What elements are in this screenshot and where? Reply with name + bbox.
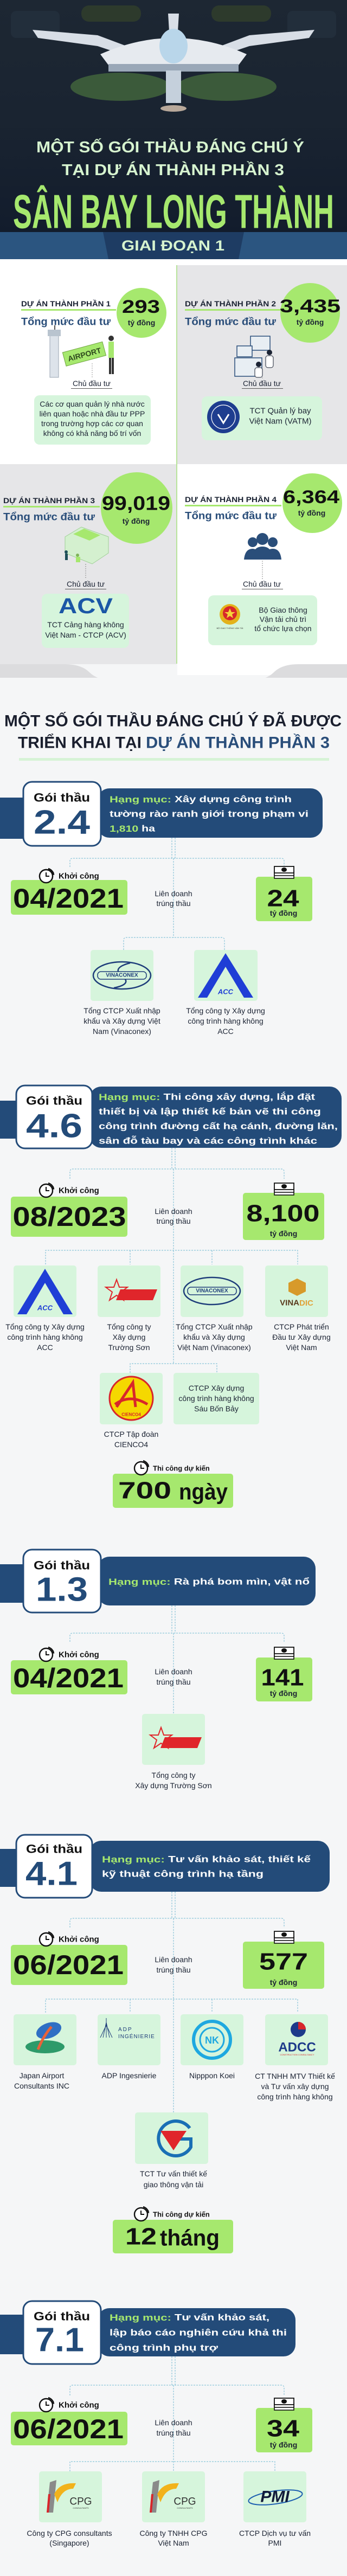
box: VATM: Việt Nam (VATM): [249, 416, 312, 426]
contractor: CPG Viet Nam: CPG: [174, 2496, 196, 2507]
header: Goi thau 2.4: Hạng mục: Xây dựng công trình: [110, 794, 292, 805]
label: Chu dau tu: Chủ đầu tư: [73, 379, 111, 388]
contractor: Sau Bon Bay: CTCP Xây dựng: [189, 1384, 244, 1392]
header: Goi thau 1.3: Gói thầu: [34, 1558, 90, 1572]
contractor: CPG Singapore: CPG: [69, 2496, 92, 2507]
contractor: Vinaconex: Việt Nam (Vinaconex): [177, 1343, 251, 1352]
header: Goi thau 4.1: 4.1: [25, 1855, 78, 1892]
contractor: ACC: ACC: [37, 1303, 53, 1312]
icon: people group: [244, 533, 281, 560]
box: VATM: TCT Quản lý bay: [249, 407, 311, 415]
panel: Du an thanh phan 2: [176, 265, 347, 464]
value: 34 ty dong: 34: [267, 2415, 300, 2442]
duration: 12 thang: Thi công dự kiến: [153, 2210, 210, 2219]
start date: 06/2021: [11, 1932, 127, 1985]
contractor: Vinadic: [265, 1265, 331, 1352]
value: 141 ty dong: 141: [261, 1665, 304, 1691]
contractor: TEDI: TCT Tư vấn thiết kế: [140, 2169, 207, 2178]
header: Goi thau 2.4: 1,810 ha: [110, 823, 156, 834]
contractor: ACC: ACC: [217, 1027, 234, 1036]
header: Goi thau 2.4: 2.4: [34, 804, 91, 841]
contractor: Vinadic: CTCP Phát triển: [274, 1322, 329, 1331]
contractor: Vinaconex: Nam (Vinaconex): [93, 1027, 151, 1036]
panel: Du an thanh phan 2: Tổng mức đầu tư: [185, 317, 276, 327]
contractor: ACC: ACC: [37, 1343, 53, 1352]
value: 34 ty dong: [256, 2398, 312, 2452]
circle: 3,435 ty dong: 3,435: [280, 296, 340, 317]
header: Goi thau 1.3: 1.3: [36, 1571, 88, 1608]
contractor: Vinadic: Việt Nam: [286, 1343, 317, 1352]
title: upper lines: [36, 138, 304, 179]
header: Goi thau 4.6: Hạng mục: Thi công xây dựng, lắp đặt: [99, 1092, 315, 1102]
value: 8,100 ty dong: 8,100: [246, 1200, 320, 1226]
contractor: ADCC: [255, 2014, 335, 2101]
header: Goi thau 4.6: sân đỗ tàu bay và các công trình khác: [99, 1135, 317, 1146]
label: Lien doanh trung thau: Liên doanh: [155, 1207, 192, 1216]
contractor: ADCC: CONSTRUCTION CONSULTANCY: [280, 2053, 314, 2056]
label: Lien doanh trung thau: [155, 2418, 192, 2437]
contractor: CPG Singapore: (Singapore): [49, 2539, 89, 2547]
package 1.3: [0, 1550, 316, 1790]
start date: 04/2021: 04/2021: [13, 1663, 124, 1693]
package 7.1: [0, 2301, 312, 2547]
box: ACV: ACV: [59, 594, 113, 618]
label: Lien doanh trung thau: trúng thầu: [156, 1678, 191, 1686]
section heading: [4, 711, 342, 761]
contractor: Nippon Koei: [181, 2014, 243, 2080]
box: Bo Giao thong Van tai: Vận tải chủ trì: [260, 615, 306, 624]
contractor: Sau Bon Bay: công trình hàng không: [178, 1394, 254, 1403]
icon: airport tower and sign: AIRPORT: [67, 346, 102, 363]
duration: 12 thang: [113, 2207, 233, 2253]
header: Goi thau 4.1: Hạng mục: Tư vấn khảo sát, thiết kế: [102, 1854, 311, 1864]
box: investor 1: liên quan hoặc nhà đầu tư PPP: [40, 409, 145, 418]
contractor: ACC: công trình hàng không: [7, 1333, 83, 1341]
label: Lien doanh trung thau: [155, 1667, 192, 1686]
box: Bo Giao thong Van tai: Bộ Giao thông: [259, 606, 307, 614]
panel: Du an thanh phan 3: Tổng mức đầu tư: [3, 512, 95, 523]
value: 577 ty dong: [243, 1931, 324, 1989]
contractor: Sau Bon Bay: [174, 1373, 259, 1424]
value: 24 ty dong: tỷ đồng: [270, 909, 297, 917]
contractor: Vinaconex: Tổng CTCP Xuất nhập: [176, 1322, 253, 1331]
circle: 293 ty dong: tỷ đồng: [128, 318, 155, 327]
value: 24 ty dong: 24: [267, 885, 299, 912]
contractor: Truong Son: Xây dựng Trường Sơn: [135, 1781, 212, 1790]
package 4.6: [0, 1085, 342, 1508]
box: Bo Giao thong Van tai: tổ chức lựa chọn: [254, 624, 312, 633]
box: investor 1: [34, 395, 151, 445]
panel: Du an thanh phan 2: DỰ ÁN THÀNH PHẦN 2: [185, 299, 276, 308]
duration: 700 ngay: Thi công dự kiến: [153, 1464, 210, 1473]
value: 8,100 ty dong: [243, 1183, 324, 1240]
header: Goi thau 2.4: [0, 782, 323, 846]
box: VATM: [202, 396, 322, 440]
label: Chu dau tu: Chủ đầu tư: [67, 580, 105, 588]
contractor: TEDI: giao thông vận tải: [144, 2180, 203, 2189]
label: Lien doanh trung thau: [155, 1207, 192, 1225]
label: Lien doanh trung thau: [155, 1955, 192, 1974]
contractor: CPG Singapore: [27, 2471, 112, 2547]
contractor: Truong Son: [135, 1714, 212, 1790]
box: Bo Giao thong Van tai: [208, 595, 317, 645]
label: Lien doanh trung thau: trúng thầu: [156, 1217, 191, 1225]
circle: 99,019 ty dong: [101, 472, 172, 544]
header: Goi thau 7.1: Gói thầu: [34, 2310, 90, 2323]
contractor: Truong Son: Xây dựng: [113, 1333, 145, 1341]
circle: 99,019 ty dong: 99,019: [102, 492, 170, 514]
header: airport photo background: [0, 0, 347, 265]
start date: 04/2021: Khởi công: [59, 1650, 99, 1659]
contractor: Truong Son: Tổng công ty: [107, 1322, 151, 1331]
header: Goi thau 1.3: [0, 1550, 316, 1613]
header: Goi thau 4.6: Gói thầu: [26, 1094, 82, 1107]
start date: 04/2021: 04/2021: [13, 883, 124, 914]
header: Goi thau 1.3: Hạng mục: Rà phá bom mìn, vật nổ: [108, 1577, 310, 1586]
icon: airport tower and sign: [48, 325, 114, 377]
contractor: CPG Viet Nam: CONSULTANTS: [177, 2507, 193, 2509]
contractor: ADP Ingenierie: [98, 2014, 160, 2080]
contractor: CPG Viet Nam: Việt Nam: [158, 2539, 189, 2547]
contractor: ADCC: công trình hàng không: [257, 2092, 333, 2101]
contractor: Japan Airport Consultants: [14, 2014, 76, 2090]
contractor: Vinaconex: VINACONEX: [106, 973, 138, 978]
package 4.1: [0, 1835, 335, 2253]
contractor: ACC: [5, 1265, 85, 1352]
contractor: Vinaconex: khẩu và Xây dựng: [183, 1333, 245, 1341]
start date: 08/2023: Khởi công: [59, 1186, 99, 1195]
contractor: CIENCO4: CIENCO4: [114, 1440, 148, 1449]
start date: 06/2021: 06/2021: [13, 1950, 124, 1980]
banner: GIAI ĐOẠN 1: [0, 232, 347, 259]
circle: 6,364 ty dong: [282, 473, 342, 533]
contractor: Japan Airport Consultants: Consultants INC: [14, 2082, 69, 2090]
start date: 04/2021: Khởi công: [59, 872, 99, 881]
duration: 700 ngay: [113, 1461, 233, 1508]
label: Lien doanh trung thau: trúng thầu: [156, 1965, 191, 1974]
contractor: PMI: PMI: [268, 2539, 281, 2547]
start date: 04/2021: [11, 1647, 127, 1694]
contractor: ACC: [186, 950, 265, 1036]
box: ACV: TCT Cảng hàng không: [47, 620, 124, 629]
contractor: CPG Singapore: CONSULTANTS: [73, 2507, 89, 2509]
circle: 6,364 ty dong: 6,364: [283, 487, 339, 508]
header: Goi thau 7.1: Hạng mục: Tư vấn khảo sát,: [110, 2312, 269, 2323]
header: Goi thau 4.1: kỹ thuật công trình hạ tầng: [102, 1868, 264, 1879]
value: 34 ty dong: tỷ đồng: [270, 2440, 297, 2449]
header: Goi thau 4.6: công trình đường cất hạ cánh, đường lăn,: [99, 1121, 338, 1131]
contractor: Vinaconex: [176, 1265, 253, 1352]
package 2.4: [0, 782, 323, 1036]
box: investor 1: Các cơ quan quản lý nhà nước: [40, 400, 145, 408]
contractor: CIENCO4: [100, 1373, 163, 1449]
contractor: Truong Son: Tổng công ty: [152, 1771, 195, 1780]
panel: Du an thanh phan 1: DỰ ÁN THÀNH PHẦN 1: [21, 299, 111, 308]
contractor: ACC: công trình hàng không: [188, 1017, 264, 1025]
contractor: Vinaconex: [83, 950, 160, 1036]
contractor: ACC: Tổng công ty Xây dựng: [5, 1322, 85, 1331]
icon: terminal building: [65, 527, 108, 579]
icon: air traffic controllers: [235, 336, 273, 380]
contractor: Truong Son: [98, 1265, 160, 1352]
value: 141 ty dong: [256, 1647, 312, 1701]
start date: 06/2021: 06/2021: [13, 2414, 124, 2444]
circle: 293 ty dong: [117, 288, 166, 338]
panel: Du an thanh phan 1: [0, 265, 177, 464]
value: 24 ty dong: [256, 866, 312, 921]
header: Goi thau 7.1: 7.1: [35, 2322, 84, 2359]
contractor: Sau Bon Bay: Sáu Bốn Bảy: [194, 1404, 239, 1413]
contractor: ADCC: CT TNHH MTV Thiết kế: [255, 2072, 335, 2080]
circle: 6,364 ty dong: tỷ đồng: [298, 509, 325, 517]
label: Lien doanh trung thau: trúng thầu: [156, 899, 191, 908]
title: upper lines: TẠI DỰ ÁN THÀNH PHẦN 3: [62, 160, 284, 179]
contractor: Vinadic: VINADIC: [280, 1298, 313, 1308]
label: Lien doanh trung thau: Liên doanh: [155, 889, 192, 898]
contractor: PMI: CTCP Dịch vụ tư vấn: [239, 2529, 311, 2538]
header: Goi thau 4.1: [0, 1835, 330, 1898]
label: Lien doanh trung thau: [155, 889, 192, 908]
contractor: ADP Ingenierie: ADP Ingesnierie: [102, 2071, 157, 2080]
contractor: Japan Airport Consultants: Japan Airport: [20, 2071, 64, 2080]
title: upper lines: MỘT SỐ GÓI THẦU ĐÁNG CHÚ Ý: [36, 138, 304, 156]
header: Goi thau 4.6: thiết bị và lập thiết kế bản vẽ thi công: [99, 1106, 321, 1117]
contractor: CPG Viet Nam: Công ty TNHH CPG: [140, 2529, 207, 2538]
label: Lien doanh trung thau: Liên doanh: [155, 2418, 192, 2427]
panel: Du an thanh phan 3: DỰ ÁN THÀNH PHẦN 3: [3, 496, 95, 505]
contractor: Vinaconex: Tổng CTCP Xuất nhập: [83, 1006, 160, 1015]
contractor: Nippon Koei: NK: [205, 2035, 219, 2046]
start date: 04/2021: [11, 869, 127, 915]
contractor: ADCC: ADCC: [278, 2040, 316, 2055]
contractor: Truong Son: Trường Sơn: [108, 1343, 150, 1352]
header: Goi thau 7.1: [0, 2301, 295, 2364]
contractor: ACC: Tổng công ty Xây dựng: [186, 1006, 265, 1015]
panel: Du an thanh phan 4: DỰ ÁN THÀNH PHẦN 4: [185, 495, 277, 504]
circle: 3,435 ty dong: tỷ đồng: [297, 318, 324, 326]
contractor: CIENCO4: CTCP Tập đoàn: [104, 1430, 158, 1438]
circle: 99,019 ty dong: tỷ đồng: [123, 517, 150, 525]
label: Lien doanh trung thau: Liên doanh: [155, 1955, 192, 1964]
contractor: PMI: [239, 2471, 311, 2547]
box: investor 1: trong trường hợp các cơ quan: [41, 419, 143, 428]
contractor: PMI: PMI: [260, 2488, 290, 2506]
header: Goi thau 4.1: Gói thầu: [26, 1842, 82, 1855]
header: Goi thau 7.1: lập báo cáo nghiên cứu khả thi: [110, 2327, 287, 2338]
logo: national emblem: BỘ GIAO THÔNG VẬN TẢI: [217, 627, 243, 629]
circle: 3,435 ty dong: [280, 283, 340, 343]
contractor: ADP Ingenierie: ADP: [118, 2027, 133, 2033]
header: Goi thau 7.1: công trình phụ trợ: [110, 2342, 219, 2353]
panel: Du an thanh phan 4: [176, 464, 347, 675]
contractor: Vinaconex: khẩu và Xây dựng Việt: [83, 1017, 160, 1025]
value: 8,100 ty dong: tỷ đồng: [270, 1229, 297, 1238]
contractor: Nippon Koei: Nipppon Koei: [189, 2071, 235, 2080]
header: Goi thau 4.6: [0, 1085, 342, 1148]
start date: 06/2021: Khởi công: [59, 2401, 99, 2410]
panel: Du an thanh phan 1: Tổng mức đầu tư: [21, 317, 111, 327]
header: Goi thau 2.4: Gói thầu: [34, 791, 90, 805]
header: Goi thau 2.4: tường rào ranh giới trong phạm vi: [110, 809, 309, 819]
section heading: DỰ ÁN THÀNH PHẦN 3: [146, 733, 330, 751]
contractor: TEDI: [135, 2112, 208, 2189]
label: Chu dau tu: Chủ đầu tư: [243, 580, 281, 588]
panel: Du an thanh phan 4: Tổng mức đầu tư: [185, 511, 277, 522]
value: 141 ty dong: tỷ đồng: [270, 1689, 297, 1698]
section heading: MỘT SỐ GÓI THẦU ĐÁNG CHÚ Ý ĐÃ ĐƯỢC: [4, 711, 342, 730]
contractor: ADCC: và Tư vấn xây dựng: [261, 2082, 329, 2091]
banner: GIAI ĐOẠN 1: GIAI ĐOẠN 1: [121, 237, 224, 254]
contractor: ACC: ACC: [217, 988, 234, 995]
header: Goi thau 4.6: 4.6: [26, 1107, 82, 1145]
duration: 12 thang: 12: [125, 2223, 157, 2250]
logo: VATM: [207, 401, 240, 433]
contractor: CPG Viet Nam: [140, 2471, 207, 2547]
panel: Du an thanh phan 3: [0, 464, 177, 664]
start date: 08/2023: 08/2023: [13, 1202, 126, 1232]
box: ACV: Việt Nam - CTCP (ACV): [45, 631, 126, 639]
contractor: CPG Singapore: Công ty CPG consultants: [27, 2529, 112, 2538]
contractor: ADP Ingenierie: INGÉNIERIE: [118, 2033, 155, 2040]
contractor: Vinadic: Đầu tư Xây dựng: [272, 1333, 331, 1341]
contractor: Vinaconex: VINACONEX: [196, 1288, 228, 1294]
logo: national emblem: [217, 604, 243, 629]
duration: 700 ngay: 700: [118, 1477, 171, 1504]
duration: 700 ngay: ngày: [179, 1479, 228, 1504]
duration: 12 thang: tháng: [160, 2225, 220, 2250]
label: Lien doanh trung thau: Liên doanh: [155, 1667, 192, 1676]
start date: 08/2023: [11, 1183, 127, 1237]
start date: 06/2021: [11, 2398, 127, 2445]
start date: 06/2021: Khởi công: [59, 1935, 99, 1944]
contractor: CIENCO4: CIENCO4: [121, 1412, 141, 1417]
value: 577 ty dong: 577: [259, 1949, 308, 1975]
label: Chu dau tu: Chủ đầu tư: [243, 379, 281, 388]
box: ACV: [42, 594, 129, 648]
section heading: TRIỂN KHAI TẠI: [18, 733, 142, 751]
circle: 293 ty dong: 293: [122, 297, 160, 317]
value: 577 ty dong: tỷ đồng: [270, 1978, 297, 1987]
label: Lien doanh trung thau: trúng thầu: [156, 2429, 191, 2437]
box: investor 1: không có khả năng bố trí vốn: [43, 429, 141, 438]
